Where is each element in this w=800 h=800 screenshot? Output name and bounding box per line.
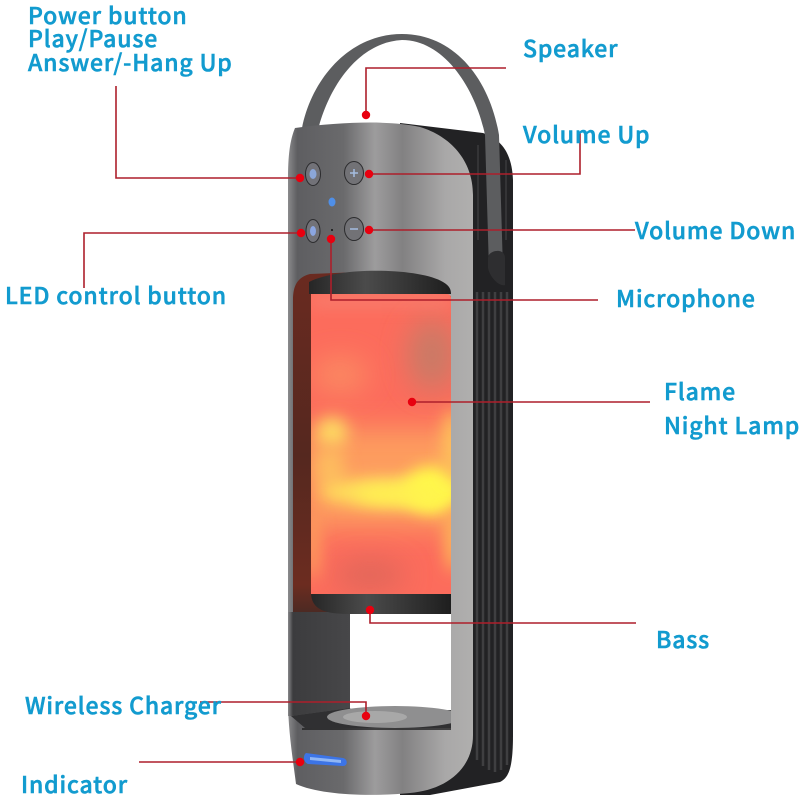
speaker handle	[302, 34, 503, 270]
label: microphone: Microphone	[616, 280, 756, 314]
label: wireless charger: Wireless Charger	[25, 687, 222, 721]
label: flame night lamp	[664, 373, 800, 441]
lower inner dark panel	[288, 612, 350, 716]
label: LED control button: LED control button	[5, 277, 227, 311]
lamp top cap	[309, 271, 451, 294]
metal body frame	[288, 123, 473, 795]
handle hinge	[488, 251, 505, 285]
rear ribbed black housing	[400, 123, 513, 795]
label: power button: Play/Pause	[28, 20, 158, 54]
indicator light	[304, 753, 347, 766]
cut-out gap under the lamp	[350, 612, 451, 710]
label: power button: Answer/-Hang Up	[28, 44, 233, 78]
flame night lamp	[311, 294, 451, 594]
window dark interior	[293, 272, 451, 640]
label: indicator: Indicator	[21, 766, 128, 800]
callout dots	[296, 111, 416, 766]
lamp bottom cap	[311, 592, 451, 614]
label: flame night lamp: Flame	[664, 373, 736, 407]
label: speaker: Speaker	[523, 30, 618, 64]
label: bass: Bass	[656, 621, 710, 655]
wireless charger pad	[291, 706, 451, 730]
callout leader lines	[84, 68, 650, 762]
label: flame night lamp: Night Lamp	[664, 407, 800, 441]
label: power button	[28, 0, 233, 78]
control buttons	[306, 162, 364, 242]
label: volume up: Volume Up	[522, 116, 650, 150]
label: volume down: Volume Down	[634, 212, 796, 246]
